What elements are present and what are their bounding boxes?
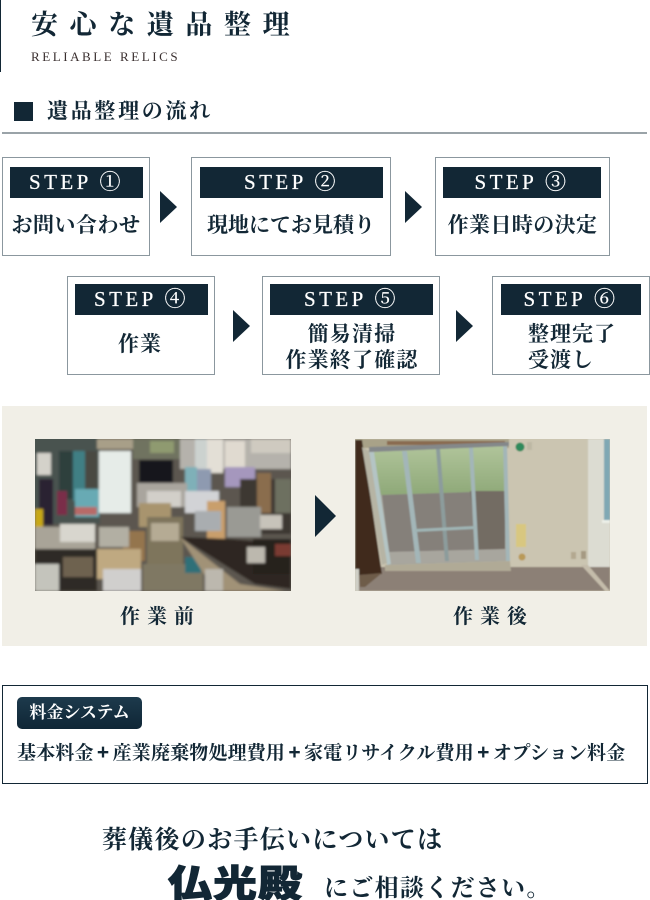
subtitle: RELIABLE RELICS	[31, 49, 180, 64]
step 5 text	[285, 322, 419, 372]
arrow	[315, 495, 336, 537]
pricing label pill	[17, 697, 142, 729]
step 5 text: 作業終了確認	[285, 348, 419, 372]
step 4 text: 作業	[118, 332, 162, 356]
step 3 label: STEP ③	[475, 170, 569, 194]
section heading: flow	[14, 99, 213, 123]
pricing label pill: 料金システム	[29, 703, 130, 722]
step 2 label: STEP ②	[244, 170, 339, 194]
panel: pricing	[2, 685, 648, 784]
header accent bar	[0, 0, 1, 72]
step 1	[2, 157, 150, 256]
step 5	[262, 276, 440, 375]
photo: before cleanup	[35, 439, 291, 591]
step 2 text: 現地にてお見積り	[207, 213, 375, 237]
step 6 text: 整理完了	[528, 322, 616, 346]
heading rule	[2, 132, 647, 134]
photo: after cleanup	[355, 439, 610, 591]
caption: before: 作業前	[120, 606, 201, 628]
step 4 label: STEP ④	[94, 287, 189, 311]
step 4 label	[75, 284, 208, 315]
step 6 text	[528, 322, 616, 372]
step 6 label	[501, 284, 641, 315]
step 3 label	[443, 167, 601, 198]
step 5 label	[270, 284, 433, 315]
step 4	[67, 276, 215, 375]
pricing formula: +	[477, 741, 490, 764]
step 2	[191, 157, 391, 256]
panel: before and after	[2, 406, 647, 646]
step 1 label: STEP ①	[29, 170, 124, 194]
caption: after: 作業後	[453, 606, 534, 628]
step 1 label	[10, 167, 143, 198]
pricing formula: +	[97, 741, 109, 764]
icon: heading square	[14, 102, 33, 121]
step 5 text: 簡易清掃	[308, 322, 396, 346]
arrow	[405, 191, 422, 223]
step 6	[492, 276, 650, 375]
step 5 label: STEP ⑤	[304, 287, 399, 311]
heading text: 遺品整理の流れ	[47, 99, 213, 123]
arrow	[233, 310, 250, 342]
step 6 label: STEP ⑥	[524, 287, 618, 311]
title: 安心な遺品整理	[31, 10, 301, 40]
pricing formula: 基本料金 産業廃棄物処理費用 家電リサイクル費用 オプション料金	[17, 743, 625, 764]
step 2 label	[200, 167, 383, 198]
step 1 text: お問い合わせ	[12, 213, 140, 237]
closing line 1: 葬儀後のお手伝いについては	[102, 827, 443, 854]
step 3 text: 作業日時の決定	[448, 213, 597, 237]
arrow	[456, 310, 473, 342]
pricing formula: +	[288, 741, 301, 764]
step 6 text: 受渡し	[528, 348, 594, 372]
arrow	[160, 191, 177, 223]
step 3	[435, 157, 610, 256]
